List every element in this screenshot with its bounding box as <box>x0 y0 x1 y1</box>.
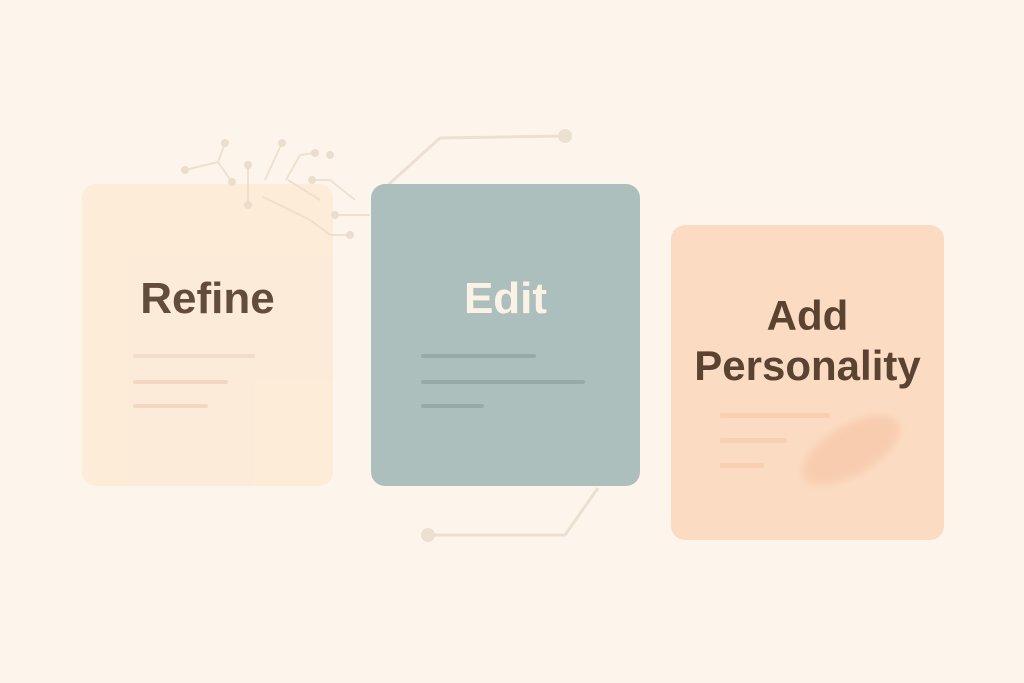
card: Edit <box>371 184 640 486</box>
heading: Edit: Edit <box>464 274 547 323</box>
card: Refine <box>82 184 333 486</box>
heading: Add Personality <box>694 292 921 389</box>
card: Add Personality <box>671 225 944 540</box>
heading: Refine: Refine <box>140 274 275 323</box>
heading: Add Personality: Add <box>767 292 848 339</box>
brush stroke <box>791 401 911 499</box>
heading: Add Personality: Personality <box>694 342 921 389</box>
